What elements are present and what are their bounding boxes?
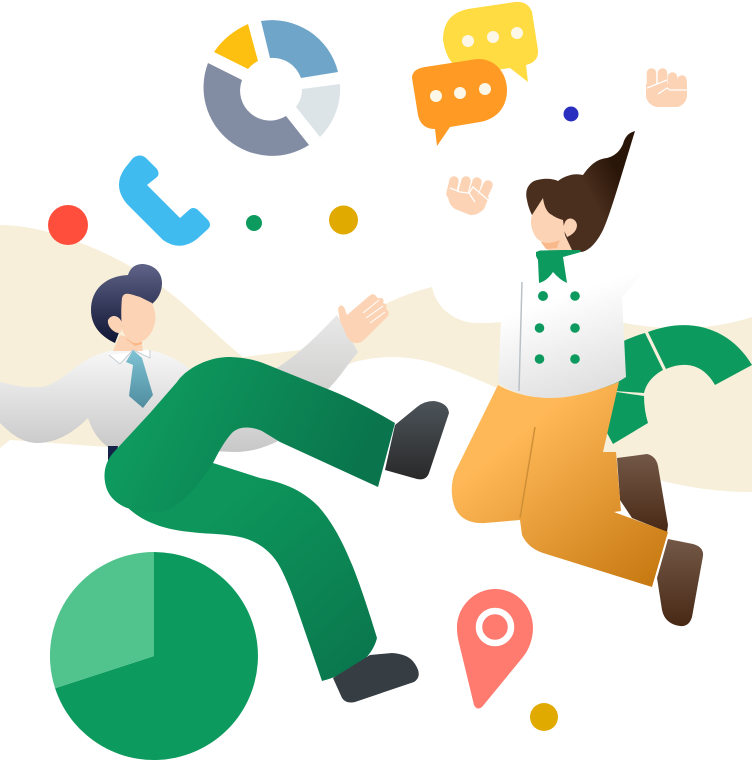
trousers: [452, 382, 668, 587]
front trouser leg: [104, 357, 395, 513]
shirt and left arm: [0, 349, 280, 452]
belt: [108, 446, 118, 462]
segment: slate: [204, 63, 309, 156]
pie chart: green: [50, 552, 258, 760]
speech bubble: yellow: [443, 2, 538, 82]
ear: [108, 316, 122, 333]
speech bubble: orange: [412, 59, 507, 146]
icon: fist right: [646, 73, 687, 107]
coat buttons: [535, 291, 580, 364]
segment: blue: [261, 20, 338, 78]
icon: telephone handset: [119, 156, 210, 246]
character: man: [0, 264, 449, 702]
face: [121, 294, 155, 343]
hair: [526, 131, 635, 252]
scarf: [536, 250, 581, 283]
neck: [543, 235, 573, 252]
dot: blue: [564, 106, 578, 122]
hair: [91, 264, 162, 343]
chef coat: [498, 215, 670, 398]
collar: [109, 350, 150, 364]
pie wedge: dark green: [55, 552, 258, 760]
icon: fist left: [448, 181, 489, 215]
dot: gold: [329, 206, 358, 234]
hand: [338, 294, 389, 343]
rear trouser leg: [128, 463, 377, 681]
neck: [113, 335, 143, 351]
background: cream wave: [0, 225, 752, 492]
rear boot: [617, 454, 668, 532]
ear: [563, 218, 577, 237]
dot: green: [246, 215, 262, 231]
donut chart: green: [600, 325, 752, 444]
donut chart: blue and grey segments: [204, 20, 340, 156]
dot: red: [48, 205, 88, 245]
segment: yellow: [214, 24, 258, 69]
coat placket line: [519, 282, 522, 391]
trouser crease: [520, 427, 535, 518]
segment: pale grey: [296, 84, 340, 137]
right arm sleeve: [270, 315, 358, 400]
pie wedge: light green: [50, 552, 154, 688]
icon: location pin: [457, 589, 533, 709]
dot: gold lower: [530, 703, 558, 731]
character: chef: [452, 131, 703, 626]
shoe: upper: [385, 401, 449, 479]
shoe: lower: [333, 653, 419, 702]
necktie: [126, 350, 153, 408]
front boot: [657, 539, 703, 626]
face: [531, 198, 565, 243]
